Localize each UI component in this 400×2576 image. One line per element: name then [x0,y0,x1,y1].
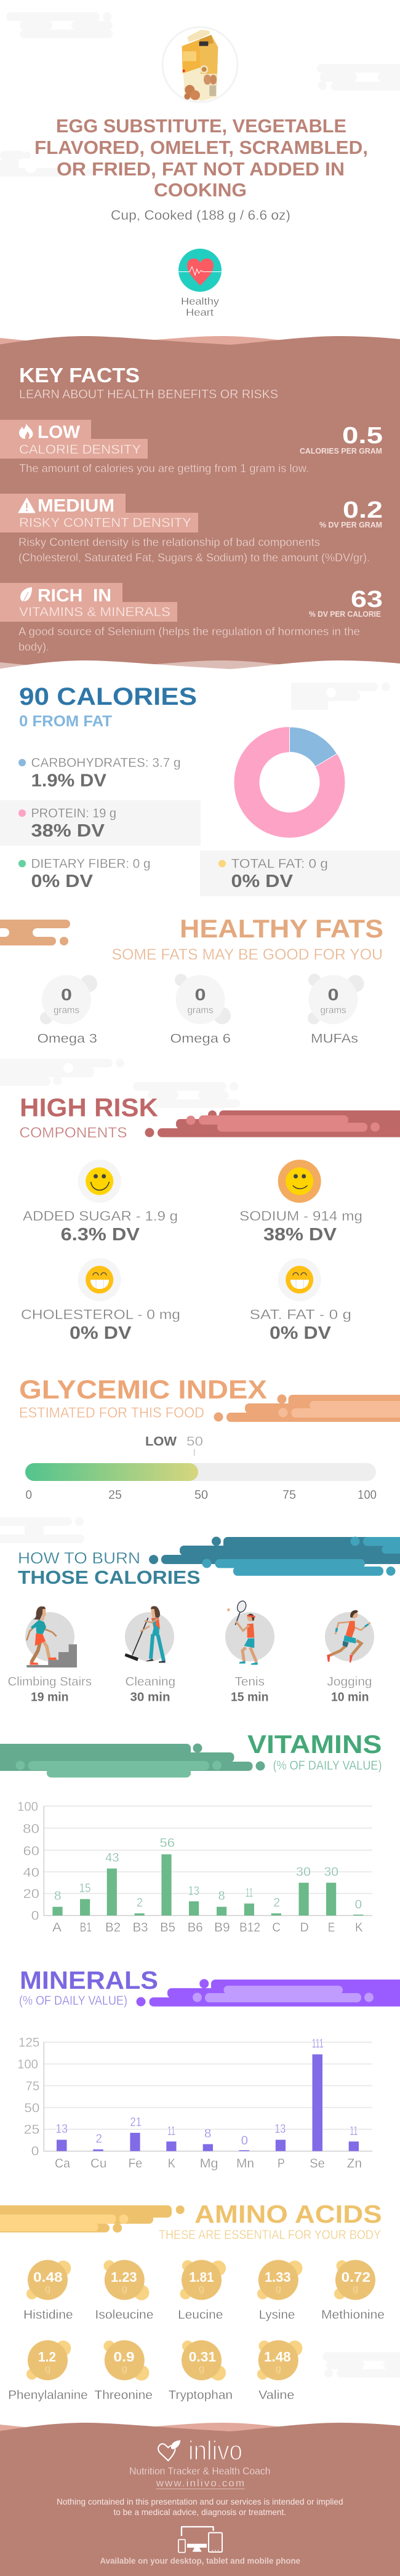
macro: dietary fiber: 0% DV [31,872,94,891]
fact: rich in vitamins and minerals: 63 [351,587,383,612]
bar chart: vitamins: 0 [355,1898,362,1912]
panel: minerals [17,1966,400,2171]
gauge scale: 25 [108,1488,122,1502]
amino: leucine: Leucine [178,2308,223,2322]
heading: high risk: HIGH RISK [20,1093,158,1121]
decorative banner [145,1110,400,1138]
item: saturated fat: 0% DV [270,1323,332,1343]
fat: omega 6: Omega 6 [170,1032,231,1046]
bar chart: vitamins: 15 [79,1881,91,1895]
amino: tryptophan: Tryptophan [169,2388,233,2402]
fact: risky content density [0,494,383,564]
activity: climbing stairs [7,1607,92,1704]
amino: isoleucine: Isoleucine [95,2308,154,2322]
bar chart: vitamins: A [52,1920,62,1935]
heading: vitamins: VITAMINS [247,1730,382,1759]
amino: methionine [321,2260,385,2322]
bar chart: vitamins: 60 [23,1844,39,1858]
gauge scale: 50 [194,1488,208,1502]
amino: threonine: 0.9 [113,2349,134,2365]
fact: calorie density [0,420,383,475]
fact: rich in vitamins and minerals [0,583,383,653]
background clouds: high risk [0,1059,240,1108]
decorative banner [137,1979,400,2007]
fact: risky content density: (Cholesterol, Saturated Fat, Sugars & Sodium) to the amount (%DV/gr). [18,552,370,564]
item: added sugar [23,1160,178,1245]
fact: risky content density: RISKY CONTENT DENSITY [19,516,191,530]
fat: mufas: MUFAs [311,1032,358,1046]
macro: total fat: 0% DV [231,872,294,891]
fat: omega 3: grams [54,1005,79,1016]
website link: www.inlivo.com [156,2478,244,2489]
bar chart: vitamins: 100 [17,1800,38,1814]
bar chart: minerals: Mg [200,2157,218,2171]
background clouds: header [0,12,400,177]
amino: lysine: Lysine [259,2308,295,2322]
bar chart: minerals: K [168,2157,175,2171]
fat: mufas: grams [320,1005,346,1016]
bar chart: minerals: Fe [128,2157,142,2171]
item: added sugar: 6.3% DV [61,1225,140,1245]
bar chart: minerals: 8 [204,2127,211,2141]
decorative banner [0,920,70,945]
heading: key facts: KEY FACTS [19,364,140,387]
amino: histidine: 0.48 [33,2269,63,2285]
amino: phenylalanine [8,2340,88,2402]
panel: key facts [0,336,400,677]
item: cholesterol [21,1258,180,1343]
heading: amino acids: AMINO ACIDS [194,2200,382,2228]
macro: protein [0,800,201,846]
amino: isoleucine: g [122,2284,127,2294]
bar chart: minerals: P [278,2157,285,2171]
amino: methionine: Methionine [321,2308,385,2322]
serving size: Cup, Cooked (188 g / 6.6 oz) [111,207,290,223]
item: saturated fat [250,1258,351,1343]
subheading: (% OF DAILY VALUE) [19,1994,127,2008]
fact: calorie density: CALORIES PER GRAM [300,447,382,455]
fact: rich in vitamins and minerals: body). [18,641,49,653]
macro: carbohydrates [18,756,181,790]
fact: risky content density: Risky Content density is the relationship of bad components [18,536,320,548]
bar chart: minerals: 111 [312,2037,324,2051]
panel: how to burn those calories [7,1536,400,1704]
bar chart: minerals: Se [310,2157,325,2171]
icon: devices [178,2527,222,2553]
panel: glycemic index [19,1375,400,1502]
fact: rich in vitamins and minerals: % DV PER CALORIE [309,610,381,619]
bar chart: vitamins: B3 [133,1920,148,1935]
bar chart: vitamins: B1 [80,1920,92,1935]
activity: cleaning [125,1606,175,1704]
bar chart: minerals: 2 [96,2132,102,2146]
disclaimer: Nothing contained in this presentation and our services is intended or implied [57,2497,343,2506]
activity: climbing stairs: 19 min [31,1690,69,1704]
panel: high risk components [20,1093,400,1343]
value label: LOW [145,1434,177,1449]
fat: omega 6: 0 [194,985,206,1004]
macro: dietary fiber [18,857,150,891]
title [34,115,368,201]
fat: omega 3: Omega 3 [37,1032,97,1046]
bar chart: vitamins: 8 [218,1889,225,1903]
amino: methionine: g [353,2284,358,2294]
macro: dietary fiber: DIETARY FIBER: 0 g [31,857,150,871]
activity: jogging [325,1610,374,1704]
bar chart: vitamins: 43 [105,1850,119,1864]
disclaimer [57,2497,343,2517]
fact: calorie density: CALORIE DENSITY [19,443,141,457]
bar chart: vitamins: B2 [105,1920,121,1935]
title: EGG SUBSTITUTE, VEGETABLE [56,115,346,137]
decorative banner [0,1743,265,1778]
heading: healthy fats: HEALTHY FATS [180,914,383,943]
bar chart: vitamins: C [272,1920,281,1935]
fact: calorie density: LOW [38,422,81,442]
availability note: Available on your desktop, tablet and mobile phone [100,2556,300,2566]
amino: phenylalanine: 1.2 [38,2349,56,2365]
bar chart: minerals: 100 [17,2058,38,2072]
amino: leucine [178,2260,226,2322]
amino: isoleucine [95,2260,154,2322]
heading: calories: 90 CALORIES [19,683,197,710]
panel: footer [0,2423,400,2576]
bar chart: minerals: 75 [26,2079,39,2093]
bar chart: vitamins: 2 [273,1895,280,1909]
panel: healthy fats [0,914,383,1046]
bar chart: vitamins: 8 [54,1889,62,1903]
fact: risky content density: MEDIUM [38,496,114,516]
item: sodium [239,1160,362,1245]
activity: tennis [225,1600,274,1704]
bar chart: minerals: 21 [130,2115,142,2129]
activity: tennis: 15 min [231,1690,268,1704]
decorative banner [149,1536,400,1576]
item: saturated fat: SAT. FAT - 0 g [250,1307,351,1322]
amino: phenylalanine: Phenylalanine [8,2388,88,2402]
subheading: SOME FATS MAY BE GOOD FOR YOU [112,946,383,963]
amino: threonine: Threonine [94,2388,153,2402]
panel: calories and macronutrients [0,683,400,896]
bar chart: minerals: 0 [31,2145,39,2159]
bar chart: vitamins: B5 [160,1920,175,1935]
macro: protein: 38% DV [31,821,105,841]
gauge scale: 100 [358,1488,377,1502]
tagline: Nutrition Tracker & Health Coach [129,2465,271,2477]
subheading: from fat: 0 FROM FAT [19,713,112,730]
amino: methionine: 0.72 [342,2269,370,2285]
bar chart: vitamins: B9 [214,1920,230,1935]
decorative banner [214,1395,400,1422]
icon: healthy heart: Heart [186,307,214,318]
icon: healthy heart: Healthy [181,295,220,307]
bar chart: vitamins: 40 [23,1866,39,1880]
bar chart: minerals: 11 [350,2124,358,2138]
activity: climbing stairs: Climbing Stairs [7,1675,92,1689]
amino: tryptophan [169,2340,233,2402]
decorative banner [0,2205,185,2233]
fact: calorie density: The amount of calories you are getting from 1 gram is low. [19,462,309,475]
heading line one: HOW TO BURN [18,1549,140,1567]
fact: risky content density: 0.2 [343,497,383,523]
bar chart: vitamins: D [300,1920,309,1935]
amino: isoleucine: 1.23 [111,2269,137,2285]
bar chart: vitamins: B12 [239,1920,260,1935]
bar chart: vitamins: 20 [23,1887,39,1901]
activity: cleaning: Cleaning [126,1675,175,1689]
bar chart: minerals: 13 [274,2122,286,2136]
amino: valine: Valine [258,2388,294,2402]
title: FLAVORED, OMELET, SCRAMBLED, [34,137,368,158]
panel: vitamins [0,1730,382,1935]
fat: mufas [308,974,364,1046]
bar chart: vitamins: 30 [296,1865,311,1879]
amino: valine: g [276,2364,281,2374]
amino: valine: 1.48 [264,2349,291,2365]
macro: total fat [200,851,400,896]
background cloud: amino [322,2353,400,2377]
bar chart: vitamins: B6 [188,1920,203,1935]
subheading: LEARN ABOUT HEALTH BENEFITS OR RISKS [19,388,278,401]
heading line two: THOSE CALORIES [18,1567,201,1588]
bar chart: minerals: 0 [241,2133,248,2148]
item: added sugar: ADDED SUGAR - 1.9 g [23,1208,178,1224]
activity: jogging: Jogging [327,1675,372,1689]
bar chart: vitamins: 30 [324,1865,338,1879]
fat: mufas: 0 [327,985,338,1004]
bar chart: vitamins: 13 [188,1884,199,1898]
item: cholesterol: 0% DV [70,1323,132,1343]
macro: total fat: TOTAL FAT: 0 g [231,857,328,871]
amino: tryptophan: 0.31 [189,2349,216,2365]
item: cholesterol: CHOLESTEROL - 0 mg [21,1307,180,1322]
subheading: components: COMPONENTS [20,1125,127,1141]
title: OR FRIED, FAT NOT ADDED IN [57,158,345,180]
amino: leucine: 1.81 [190,2269,214,2285]
bar chart: minerals: 13 [55,2122,68,2136]
background cloud: calories [291,683,390,710]
logo: inlivo wordmark: inlivo [188,2436,242,2466]
bar chart: minerals: Zn [347,2157,362,2171]
bar chart: vitamins: K [355,1920,363,1935]
amino: lysine: 1.33 [265,2269,291,2285]
amino: leucine: g [199,2284,204,2294]
fact: risky content density: % DV PER GRAM [319,521,382,529]
gauge bar [25,1449,376,1481]
gauge scale: 0 [26,1488,32,1502]
logo: inlivo heart [158,2440,180,2461]
bar chart: vitamins: 11 [246,1886,253,1900]
bar chart: minerals: Mn [236,2157,254,2171]
bar chart: vitamins: 2 [137,1895,143,1909]
amino: lysine [257,2260,303,2322]
icon: healthy heart [178,249,222,318]
amino: histidine [23,2260,73,2322]
fat: omega 3 [37,975,97,1046]
panel: amino acids [0,2200,385,2402]
subheading: ESTIMATED FOR THIS FOOD [19,1405,204,1421]
fat: omega 3: 0 [61,985,72,1004]
bar chart: minerals: 25 [24,2123,39,2137]
bar chart: minerals: 125 [18,2036,39,2050]
fat: omega 6 [170,974,231,1046]
subheading: (% OF DAILY VALUE) [273,1759,382,1773]
macro: carbohydrates: 1.9% DV [31,771,107,790]
amino: threonine: g [122,2364,127,2374]
food image: carton [162,27,238,102]
donut chart [247,727,337,825]
gauge scale: 75 [282,1488,296,1502]
bar chart: minerals: 11 [167,2124,175,2138]
bar chart: vitamins: E [328,1920,335,1935]
bar chart: minerals: 50 [24,2101,39,2116]
item: sodium: 38% DV [263,1225,337,1245]
gauge scale [26,1488,377,1502]
amino: lysine: g [276,2284,281,2294]
amino: tryptophan: g [199,2364,204,2374]
value number: 50 [186,1434,203,1449]
bar chart: minerals [17,2036,372,2171]
bar chart: vitamins [17,1800,372,1935]
activity: jogging: 10 min [331,1690,369,1704]
macro: protein: PROTEIN: 19 g [31,806,116,821]
activity: tennis: Tenis [235,1675,265,1689]
amino: threonine [94,2340,153,2402]
macro: carbohydrates: CARBOHYDRATES: 3.7 g [31,756,181,770]
bar chart: vitamins: 80 [23,1822,39,1836]
heading: minerals: MINERALS [20,1966,158,1994]
bar chart: vitamins: 0 [31,1909,39,1923]
item: sodium: SODIUM - 914 mg [239,1208,362,1224]
fact: rich in vitamins and minerals: VITAMINS & MINERALS [19,605,170,619]
background cloud: burn [0,1517,84,1543]
amino: histidine: g [45,2284,50,2294]
fat: omega 6: grams [187,1005,213,1016]
bar chart: vitamins: 56 [160,1836,175,1850]
title: COOKING [154,179,247,201]
amino: valine [257,2340,303,2402]
amino: phenylalanine: g [45,2364,50,2374]
amino: histidine: Histidine [23,2308,73,2322]
fact: rich in vitamins and minerals: RICH IN [38,586,111,606]
heading: glycemic index: GLYCEMIC INDEX [19,1375,267,1405]
fact: rich in vitamins and minerals: A good source of Selenium (helps the regulation of hormones in the [18,625,360,638]
disclaimer: to be a medical advice, diagnosis or treatment. [113,2507,286,2517]
bar chart: minerals: Cu [90,2157,106,2171]
bar chart: minerals: Ca [55,2157,70,2171]
activity: cleaning: 30 min [130,1690,170,1704]
fact: calorie density: 0.5 [342,423,383,449]
